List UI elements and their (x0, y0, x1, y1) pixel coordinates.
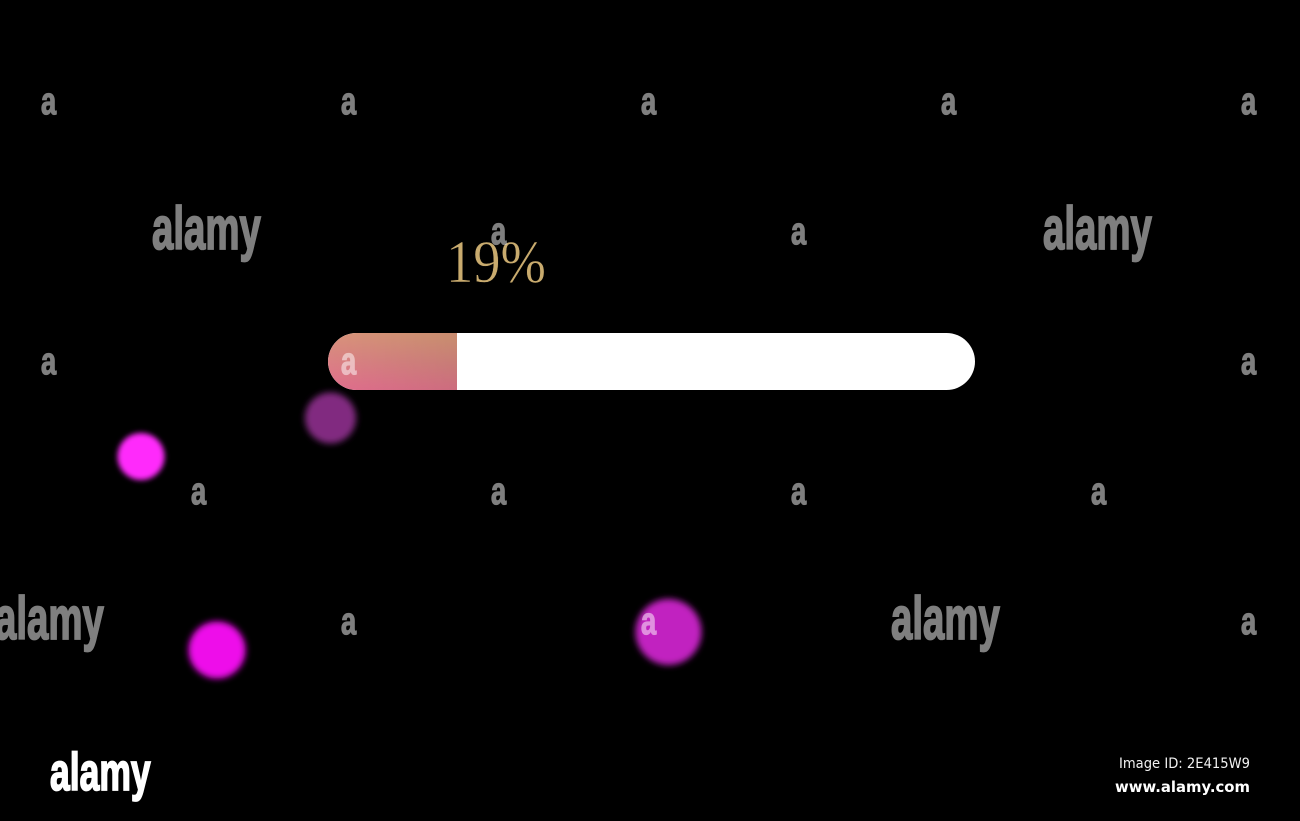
progress bar (328, 333, 975, 390)
watermark pattern: a (491, 211, 507, 253)
percentage label: 19% (446, 229, 546, 295)
image id: Image ID: 2E415W9 (1119, 756, 1250, 772)
watermark pattern: a (1241, 601, 1257, 643)
watermark pattern: a (1091, 471, 1107, 513)
floating particles (118, 392, 702, 678)
watermark pattern (0, 81, 1257, 652)
watermark pattern: alamy (1043, 194, 1152, 262)
watermark pattern: a (641, 81, 657, 123)
watermark pattern: a (791, 211, 807, 253)
watermark pattern: a (41, 81, 57, 123)
website url: www.alamy.com (1115, 778, 1250, 796)
progress bar fill 19% (328, 333, 457, 390)
watermark pattern: a (341, 601, 357, 643)
footer logo: alamy (50, 742, 151, 802)
watermark pattern: alamy (152, 194, 261, 262)
watermark pattern: a (1241, 81, 1257, 123)
particle 3 (188, 622, 246, 678)
particle 1 (118, 433, 164, 480)
watermark pattern: a (1241, 341, 1257, 383)
watermark pattern: a (791, 471, 807, 513)
watermark pattern: a (341, 341, 357, 383)
watermark pattern: a (191, 471, 207, 513)
watermark pattern: a (341, 81, 357, 123)
progress bar track (328, 333, 975, 390)
watermark pattern: a (41, 341, 57, 383)
particle 2 (305, 392, 356, 444)
watermark pattern: a (491, 471, 507, 513)
watermark pattern: a (641, 601, 657, 643)
particle 4 (636, 599, 702, 665)
watermark pattern: alamy (891, 584, 1000, 652)
watermark pattern: a (941, 81, 957, 123)
